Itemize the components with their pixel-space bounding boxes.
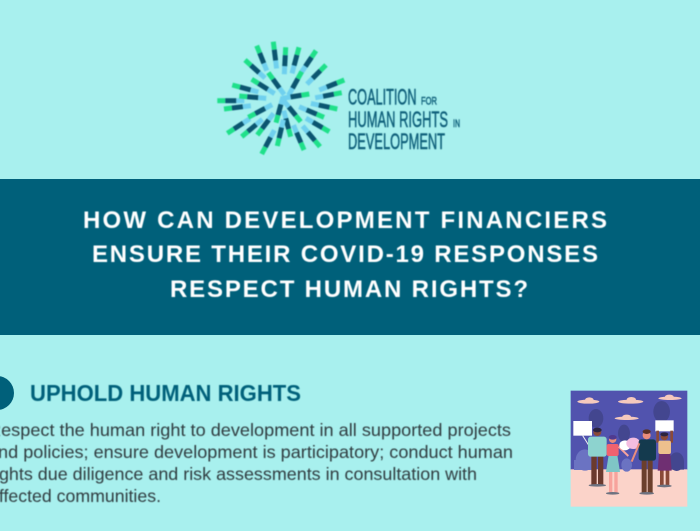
title: ENSURE THEIR COVID-19 RESPONSES xyxy=(92,241,598,268)
logo wordmark: COALITION xyxy=(348,84,416,110)
logo wordmark: FOR xyxy=(421,96,437,108)
person 2 xyxy=(606,435,628,495)
logo wordmark: DEVELOPMENT xyxy=(348,129,445,154)
title band xyxy=(0,179,700,335)
section heading: UPHOLD HUMAN RIGHTS xyxy=(30,380,301,406)
icon: coalition starburst logo xyxy=(217,41,345,155)
icon: section number circle xyxy=(0,376,14,410)
body text: rights due diligence and risk assessments in consultation with xyxy=(0,464,477,484)
clouds xyxy=(577,395,682,420)
title: RESPECT HUMAN RIGHTS? xyxy=(170,276,528,303)
logo wordmark: IN xyxy=(453,118,460,130)
illustration: people holding protest signs xyxy=(571,391,687,507)
title xyxy=(83,207,607,303)
person 4 xyxy=(655,420,674,487)
logo wordmark xyxy=(348,84,460,154)
title: HOW CAN DEVELOPMENT FINANCIERS xyxy=(83,207,607,234)
background trees and bushes xyxy=(574,401,684,472)
center speech signs xyxy=(619,438,640,450)
person 3 xyxy=(632,429,656,495)
logo wordmark: HUMAN RIGHTS xyxy=(348,107,448,132)
body text xyxy=(0,420,513,506)
body text: Respect the human right to development in all supported projects xyxy=(0,420,511,440)
body text: and policies; ensure development is participatory; conduct human xyxy=(0,442,513,462)
person 1 xyxy=(573,421,607,487)
